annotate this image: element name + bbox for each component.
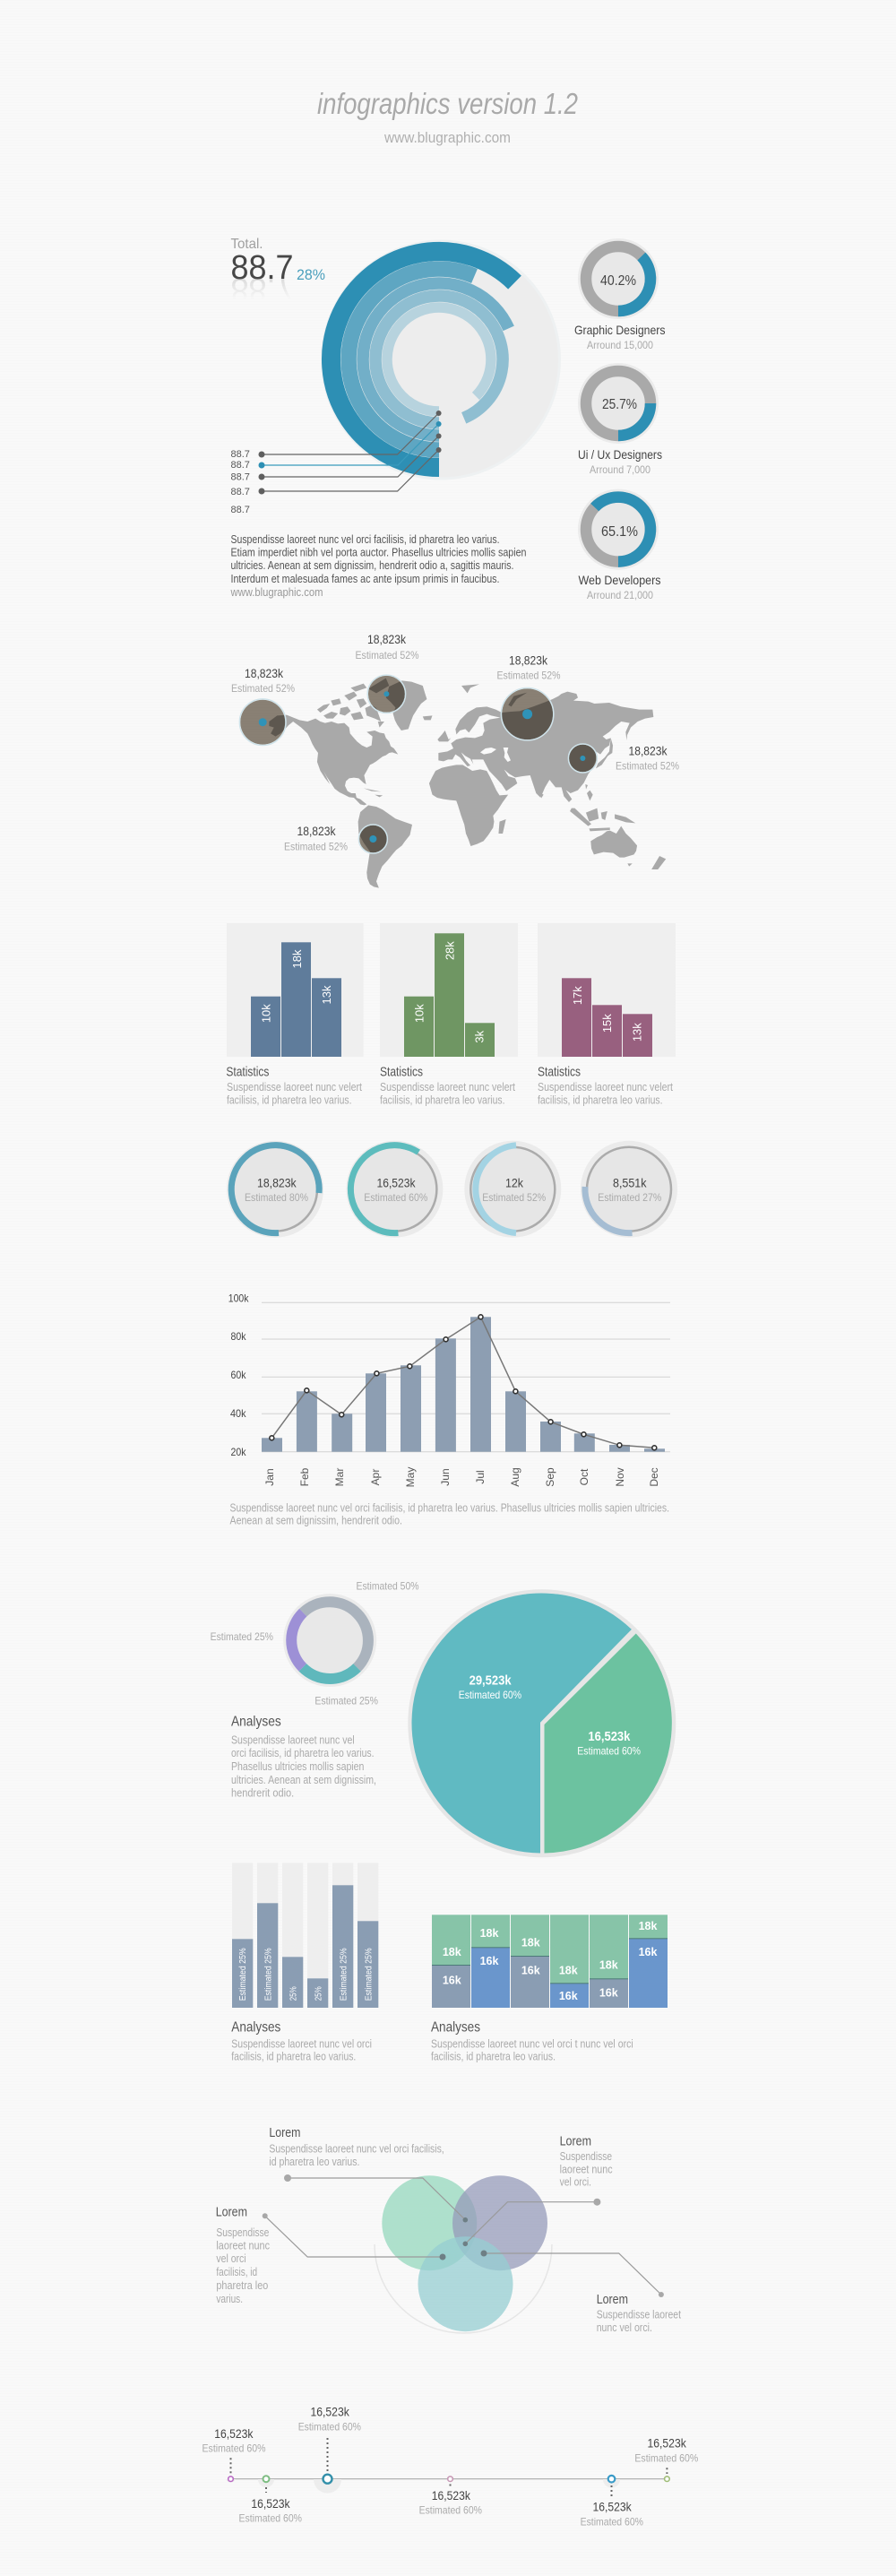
panel: statistics blue: facilisis, id pharetra leo varius. <box>227 1094 351 1107</box>
south america <box>358 805 412 888</box>
timeline label 1: Estimated 60% <box>202 2442 266 2455</box>
timeline halos <box>226 2479 620 2494</box>
progress ring 27%: Estimated 27% <box>598 1191 662 1204</box>
month labels: Oct <box>578 1468 590 1485</box>
legend leader line 2 <box>262 424 439 465</box>
timeline label 3 <box>298 2405 361 2433</box>
month labels: Apr <box>369 1469 382 1485</box>
panel: statistics green: Suspendisse laoreet nunc velert <box>380 1081 515 1094</box>
panel: statistics green <box>380 923 518 1107</box>
panel: statistics blue: 13k <box>320 985 333 1004</box>
north america <box>269 715 398 805</box>
venn note bottom right: Lorem <box>597 2292 628 2307</box>
legend values: 88.7 <box>231 471 250 482</box>
donut: web developers <box>578 489 661 601</box>
big pie chart <box>408 1589 676 1857</box>
radial arc 5 <box>387 307 491 411</box>
trend points <box>270 1315 657 1450</box>
big pie chart: Estimated 60% <box>577 1745 641 1758</box>
donut: web developers: 65.1% <box>601 524 638 540</box>
legend values: 88.7 <box>231 460 250 471</box>
big pie chart: Estimated 60% <box>459 1689 521 1701</box>
vertical progress bars: 25% <box>289 1986 299 2001</box>
venn note bottom right: nunc vel orci. <box>597 2321 652 2334</box>
donut: ui ux designers: Ui / Ux Designers <box>578 447 662 462</box>
timeline label 2: 16,523k <box>251 2496 290 2511</box>
venn note top left: Suspendisse laoreet nunc vel orci facilisis, <box>269 2143 444 2156</box>
venn note top left: Lorem <box>269 2125 300 2140</box>
timeline label 2 <box>238 2496 302 2525</box>
map label 4: 18,823k <box>629 744 668 758</box>
donut: web developers: Arround 21,000 <box>587 589 653 601</box>
timeline label 3: Estimated 60% <box>298 2421 361 2433</box>
analyses text block: Analyses <box>231 1715 281 1730</box>
legend values: 88.7 <box>231 449 250 460</box>
month labels: Nov <box>614 1467 626 1487</box>
timeline label 6: Estimated 60% <box>634 2451 699 2464</box>
y axis labels: 60k <box>231 1369 246 1381</box>
trend line <box>271 1317 654 1448</box>
big pie chart: 29,523k <box>470 1673 512 1688</box>
month labels: Jul <box>474 1470 487 1484</box>
stacked column chart: 16k <box>521 1965 540 1977</box>
panel: statistics purple: 13k <box>631 1023 643 1042</box>
panel: total radial chart <box>230 237 561 599</box>
venn note top left <box>269 2125 444 2168</box>
total description: Etiam imperdiet nibh vel porta auctor. Phasellus ultricies mollis sapien <box>231 547 527 559</box>
vertical progress bars: Estimated 25% <box>339 1948 349 2001</box>
panel: statistics purple: 17k <box>571 986 584 1005</box>
venn note top right: Lorem <box>560 2133 591 2148</box>
month labels: Jan <box>263 1468 276 1486</box>
progress ring 27%: 8,551k <box>613 1175 647 1189</box>
venn note top right: vel orci. <box>560 2176 591 2189</box>
legend values <box>231 449 250 515</box>
stacked column chart: 18k <box>480 1927 498 1940</box>
eurasia <box>437 684 653 802</box>
progress ring 52%: 12k <box>505 1175 524 1189</box>
venn outer dots <box>263 2174 664 2297</box>
venn note left: Lorem <box>216 2205 247 2220</box>
panel: statistics green: 3k <box>473 1030 486 1043</box>
small segmented donut: Estimated 25% <box>211 1630 273 1643</box>
venn note top right: laoreet nunc <box>560 2163 613 2175</box>
total label: Total. <box>231 237 263 252</box>
panel: statistics green: facilisis, id pharetra leo varius. <box>380 1094 505 1107</box>
total description: Suspendisse laoreet nunc vel orci facilisis, id pharetra leo varius. <box>231 533 500 546</box>
total description: ultricies. Aenean at sem dignissim, hendrerit odio a, sagittis mauris. <box>231 559 514 572</box>
stacked column chart: 18k <box>559 1965 578 1977</box>
timeline label 1: 16,523k <box>214 2426 254 2441</box>
month labels <box>263 1467 660 1487</box>
venn base arc <box>375 2244 552 2333</box>
venn note bottom right: Suspendisse laoreet <box>597 2309 681 2321</box>
stacked column chart: 16k <box>639 1946 657 1958</box>
vertical progress bars: facilisis, id pharetra leo varius. <box>231 2050 356 2062</box>
stacked column chart: 18k <box>443 1946 461 1958</box>
subtitle url: www.blugraphic.com <box>383 129 511 146</box>
donut: graphic designers <box>574 238 665 351</box>
month labels: Sep <box>544 1467 556 1487</box>
radial arc 3 <box>363 283 509 436</box>
progress ring 60% <box>346 1141 443 1238</box>
stacked column chart: Analyses <box>431 2020 480 2036</box>
panel: statistics blue: Statistics <box>226 1065 269 1080</box>
panel: statistics blue: 10k <box>260 1004 272 1023</box>
timeline dotted stems <box>231 2438 667 2497</box>
venn note left: varius. <box>216 2293 243 2305</box>
legend values: 88.7 <box>231 487 250 497</box>
big pie chart: 16,523k <box>588 1730 631 1744</box>
donut: ui ux designers: 25.7% <box>602 397 637 412</box>
world map <box>231 632 679 888</box>
timeline label 5 <box>581 2500 643 2528</box>
y axis labels: 80k <box>231 1330 246 1343</box>
timeline label 6 <box>634 2436 699 2464</box>
map label 4: Estimated 52% <box>616 760 679 773</box>
map label 3: Estimated 52% <box>496 670 561 682</box>
seas cut-outs <box>480 748 511 762</box>
panel: statistics green: 28k <box>443 941 457 960</box>
map label 3: 18,823k <box>509 653 548 668</box>
analyses text block: Phasellus ultricies mollis sapien <box>231 1760 364 1773</box>
vertical progress bars: Estimated 25% <box>263 1948 274 2001</box>
legend values: 88.7 <box>231 505 250 515</box>
chart description: Suspendisse laoreet nunc vel orci facilisis, id pharetra leo varius. Phasellus ultricies mollis sapien ultricies. <box>229 1502 669 1515</box>
panel: statistics green: Statistics <box>380 1065 423 1080</box>
map label 5 <box>284 824 348 853</box>
map label 4 <box>616 744 679 773</box>
radial arc 1 <box>331 252 514 468</box>
map bubbles <box>240 676 597 852</box>
total value: 88.7 <box>231 249 294 287</box>
donut: graphic designers: 40.2% <box>600 273 636 289</box>
progress ring 60%: Estimated 60% <box>364 1191 428 1204</box>
venn note top right: Suspendisse <box>560 2150 612 2163</box>
timeline label 3: 16,523k <box>310 2405 350 2419</box>
legend leader line 3 <box>262 436 439 477</box>
vertical progress bars: Suspendisse laoreet nunc vel orci <box>231 2037 372 2050</box>
month labels: Jun <box>439 1468 452 1486</box>
venn note left: Suspendisse <box>216 2226 269 2239</box>
progress ring 27% <box>581 1141 677 1238</box>
stacked column chart <box>431 1915 668 2062</box>
map label 3 <box>496 653 561 682</box>
donut: ui ux designers <box>578 363 662 476</box>
stacked column chart: 18k <box>639 1920 657 1932</box>
map label 5: 18,823k <box>297 824 336 838</box>
radial arc 2 <box>349 269 475 450</box>
stacked column chart: facilisis, id pharetra leo varius. <box>431 2050 556 2062</box>
month labels: Aug <box>509 1467 521 1487</box>
analyses text block: Suspendisse laoreet nunc vel <box>231 1734 355 1747</box>
chart description: Aenean at sem dignissim, hendrerit odio. <box>229 1515 402 1527</box>
y axis labels: 100k <box>228 1292 249 1304</box>
map label 1 <box>231 666 295 695</box>
panel: statistics purple: Statistics <box>538 1065 581 1080</box>
month labels: Dec <box>648 1467 660 1487</box>
australia <box>590 826 637 858</box>
map label 5: Estimated 52% <box>284 841 348 853</box>
bubble centre dots <box>259 691 585 843</box>
venn note left: vel orci <box>216 2252 246 2265</box>
donut: graphic designers: Graphic Designers <box>574 323 665 337</box>
islands <box>317 679 666 869</box>
total description: www.blugraphic.com <box>230 586 323 599</box>
title: infographics version 1.2 <box>317 87 578 120</box>
analyses text block: orci facilisis, id pharetra leo varius. <box>231 1747 375 1759</box>
panel: statistics purple <box>538 923 676 1107</box>
timeline label 4: 16,523k <box>432 2488 471 2503</box>
progress ring 80%: Estimated 80% <box>245 1191 308 1204</box>
total value reflection: 88.7 <box>231 271 294 308</box>
small segmented donut <box>211 1580 419 1707</box>
total description: Interdum et malesuada fames ac ante ipsum primis in faucibus. <box>231 573 500 585</box>
month labels: Feb <box>298 1467 311 1486</box>
venn note top right <box>560 2133 613 2189</box>
radial base disc <box>321 240 561 480</box>
stacked column chart: 18k <box>599 1959 618 1972</box>
eurasia islands <box>437 684 613 800</box>
vertical progress bars: Analyses <box>231 2020 280 2036</box>
bubble halos <box>239 675 597 853</box>
stacked column chart: Suspendisse laoreet nunc vel orci t nunc vel orci <box>431 2037 633 2050</box>
legend leader line 4 <box>262 450 439 491</box>
y axis labels <box>228 1292 249 1458</box>
y axis grid <box>262 1302 670 1452</box>
vertical progress bars: 25% <box>314 1986 324 2001</box>
y axis labels: 40k <box>230 1407 246 1420</box>
donut: web developers: Web Developers <box>579 573 661 587</box>
greenland <box>386 680 426 730</box>
venn note bottom right <box>597 2292 681 2334</box>
vertical progress bars: Estimated 25% <box>364 1948 375 2001</box>
vertical progress bars: Estimated 25% <box>237 1948 248 2001</box>
chart description <box>229 1502 669 1527</box>
small segmented donut: Estimated 50% <box>357 1580 419 1593</box>
stacked column chart: 16k <box>599 1986 618 1999</box>
monthly bar and line chart <box>228 1292 670 1527</box>
panel: statistics green: 10k <box>412 1004 426 1023</box>
bars <box>262 1317 665 1452</box>
venn note left: laoreet nunc <box>216 2239 270 2252</box>
analyses text block: hendrerit odio. <box>231 1786 294 1799</box>
stacked column chart: 16k <box>480 1955 498 1967</box>
panel: statistics purple: 15k <box>600 1014 614 1033</box>
map label 1: Estimated 52% <box>231 682 295 695</box>
timeline <box>202 2405 699 2528</box>
timeline label 5: Estimated 60% <box>581 2516 643 2528</box>
legend dots <box>258 411 442 495</box>
timeline label 1 <box>202 2426 266 2455</box>
y axis labels: 20k <box>231 1446 246 1458</box>
venn inner dots <box>439 2217 487 2260</box>
map label 2: 18,823k <box>367 632 407 646</box>
map label 2 <box>355 632 419 661</box>
timeline label 6: 16,523k <box>647 2436 687 2451</box>
timeline label 4 <box>419 2488 482 2517</box>
timeline label 4: Estimated 60% <box>419 2504 482 2517</box>
timeline label 5: 16,523k <box>593 2500 633 2514</box>
analyses text block <box>231 1715 376 1799</box>
panel: statistics blue <box>226 923 364 1107</box>
progress ring 80%: 18,823k <box>257 1175 297 1189</box>
progress ring 52% <box>464 1141 561 1238</box>
radial arc 4 <box>375 296 503 423</box>
venn circles <box>382 2175 547 2331</box>
donut: graphic designers: Arround 15,000 <box>587 339 653 351</box>
small segmented donut: Estimated 25% <box>314 1695 378 1707</box>
venn leader lines <box>265 2178 661 2295</box>
progress ring 52%: Estimated 52% <box>482 1191 546 1204</box>
month labels: May <box>404 1467 417 1487</box>
venn note top left: id pharetra leo varius. <box>269 2156 359 2168</box>
donut: ui ux designers: Arround 7,000 <box>590 463 650 476</box>
panel: statistics purple: Suspendisse laoreet nunc velert <box>538 1081 673 1094</box>
month labels: Mar <box>333 1468 346 1486</box>
map label 2: Estimated 52% <box>355 649 419 661</box>
panel: statistics purple: facilisis, id pharetra leo varius. <box>538 1094 663 1107</box>
stacked column chart: 16k <box>559 1990 578 2002</box>
analyses text block: ultricies. Aenean at sem dignissim, <box>231 1774 376 1786</box>
total description <box>230 533 527 599</box>
venn note left: facilisis, id <box>216 2266 257 2278</box>
venn diagram <box>216 2125 681 2334</box>
stacked column chart: 16k <box>443 1974 461 1986</box>
africa <box>429 765 508 846</box>
venn note left <box>216 2205 270 2305</box>
total percent: 28% <box>297 266 325 283</box>
timeline nodes <box>228 2475 669 2484</box>
stacked column chart: 18k <box>521 1936 540 1949</box>
venn note left: pharetra leo <box>216 2279 268 2292</box>
panel: statistics blue: Suspendisse laoreet nunc velert <box>227 1081 362 1094</box>
progress ring 60%: 16,523k <box>376 1175 416 1189</box>
progress ring 80% <box>227 1141 323 1238</box>
panel: statistics blue: 18k <box>290 949 304 968</box>
vertical progress bars <box>231 1863 378 2062</box>
timeline axis <box>231 2478 667 2480</box>
legend leader line 1 <box>262 413 439 454</box>
map label 1: 18,823k <box>245 666 284 680</box>
timeline label 2: Estimated 60% <box>238 2512 302 2525</box>
